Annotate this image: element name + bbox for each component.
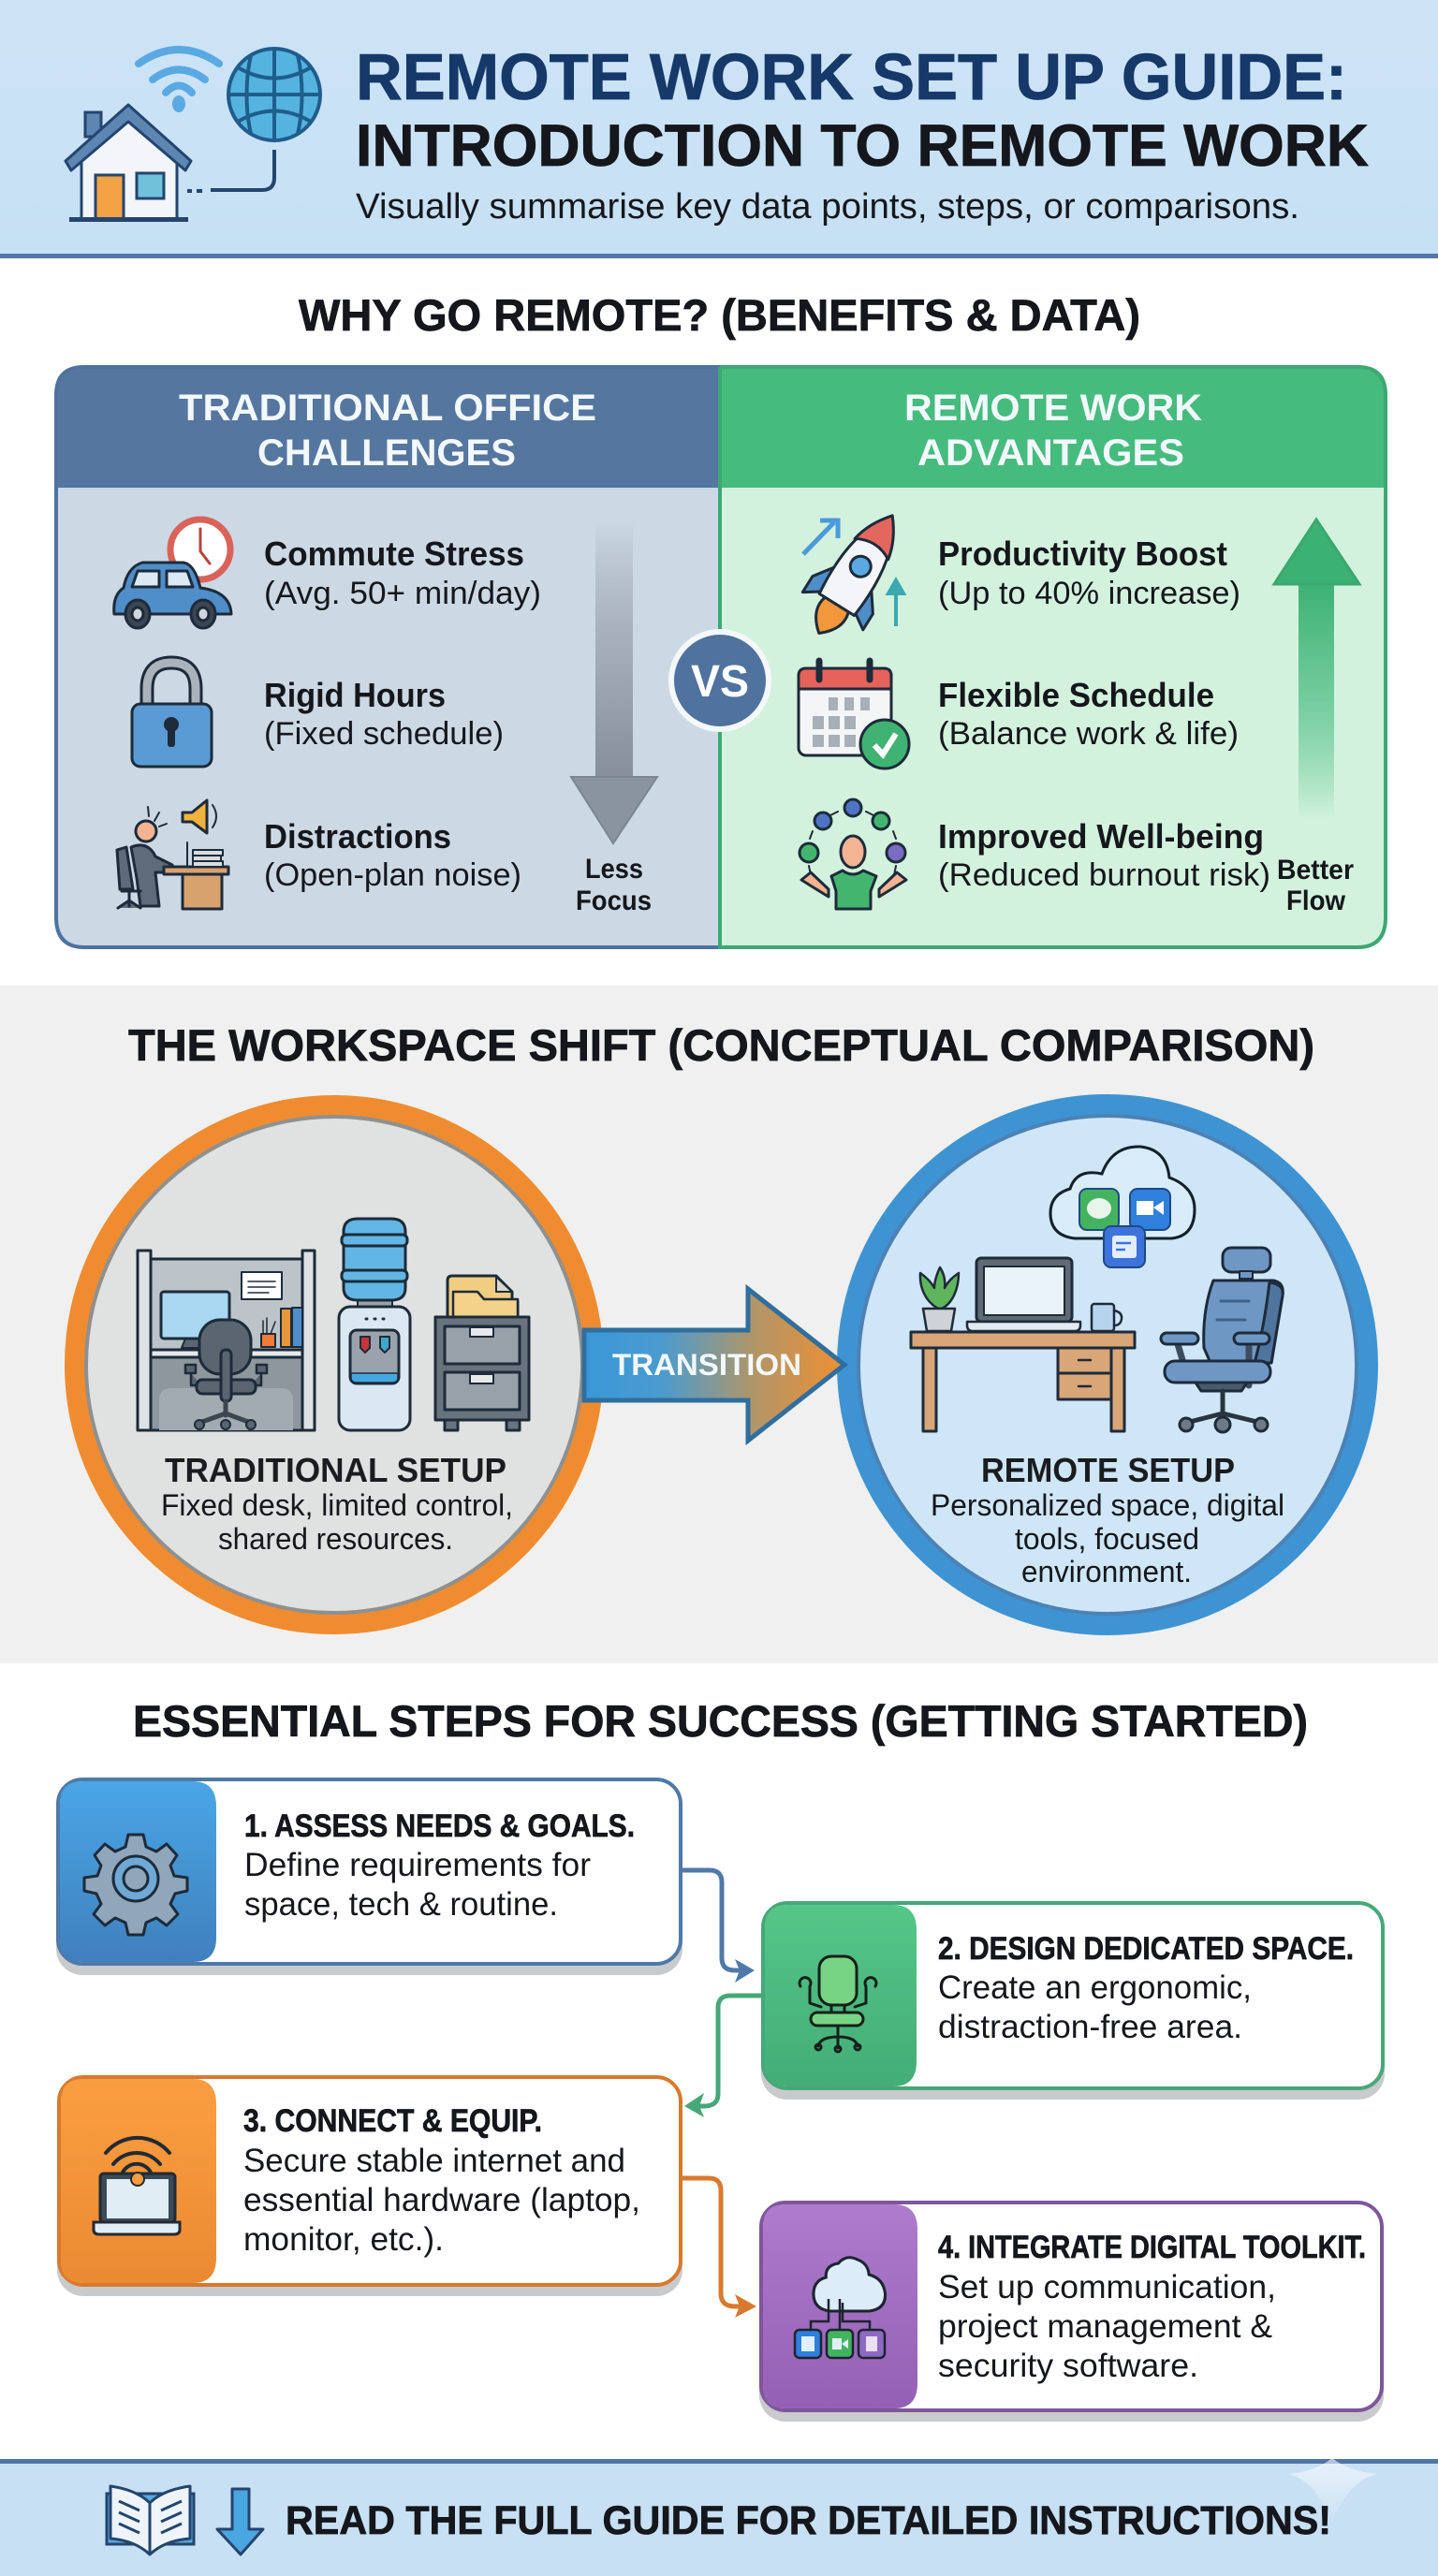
icon: rocket: [789, 497, 922, 652]
icon: calendar with check: [799, 661, 909, 768]
arrow: transition: [584, 1289, 844, 1441]
row: improved well-being: Improved Well-being: [938, 817, 1264, 856]
label: less focus: Less: [585, 854, 643, 885]
row: rigid hours: [264, 676, 504, 752]
icon: open book: [107, 2486, 194, 2554]
row: commute stress: Commute Stress: [264, 534, 524, 573]
row: productivity boost: [938, 534, 1240, 611]
connector: step 3 to 4: [682, 2178, 756, 2318]
badge: vs: VS: [691, 657, 749, 707]
row: distractions: (Open-plan noise): [264, 857, 521, 893]
icon: home with wifi and globe: [66, 49, 320, 222]
subtitle: Visually summarise key data points, steps, or comparisons.: [356, 187, 1299, 227]
icon: gear: [84, 1835, 187, 1935]
description: traditional setup: Fixed desk, limited control,: [161, 1488, 513, 1522]
connector: step 2 to 3: [684, 1996, 761, 2117]
sparkle watermark: [1288, 2458, 1377, 2523]
label: less focus: [576, 854, 652, 916]
label: better flow: Better: [1277, 855, 1354, 886]
panel heading: remote work: REMOTE WORK: [904, 388, 1202, 429]
label: better flow: Flow: [1286, 886, 1346, 916]
arrow: rising flow: [1274, 520, 1359, 820]
heading: why go remote: WHY GO REMOTE? (BENEFITS & DATA): [299, 290, 1140, 340]
row: productivity boost: (Up to 40% increase): [938, 576, 1240, 611]
step card 4: [759, 2203, 1384, 2422]
panel heading: traditional office: TRADITIONAL OFFICE: [179, 388, 596, 429]
text: step 3: monitor, etc.).: [243, 2221, 444, 2258]
label: remote setup: REMOTE SETUP: [981, 1451, 1235, 1489]
text: step 3: [243, 2103, 640, 2258]
text: step 3: Secure stable internet and: [243, 2143, 625, 2179]
row: distractions: Distractions: [264, 817, 451, 856]
icon: cloud network: [795, 2258, 886, 2358]
icon: juggling person: [800, 799, 906, 909]
icon: filing cabinet: [435, 1276, 529, 1430]
icon: padlock: [132, 663, 212, 767]
icon: distracted worker: [117, 800, 228, 909]
text: step 2: 2. DESIGN DEDICATED SPACE.: [938, 1931, 1354, 1967]
row: commute stress: (Avg. 50+ min/day): [264, 576, 541, 611]
text: step 1: 1. ASSESS NEEDS & GOALS.: [244, 1808, 635, 1844]
row: improved well-being: (Reduced burnout risk): [938, 857, 1270, 893]
icon: water cooler: [339, 1219, 410, 1430]
circle: traditional setup: [75, 1105, 594, 1624]
icon: cubicle: [138, 1251, 315, 1430]
row: rigid hours: (Fixed schedule): [264, 716, 504, 752]
label: better flow: [1277, 855, 1354, 916]
icon: down arrow: [217, 2489, 263, 2554]
connector: step 1 to 2: [682, 1870, 755, 1983]
icon: car and clock: [114, 520, 231, 628]
description: remote setup: Personalized space, digital: [931, 1488, 1284, 1522]
row: productivity boost: Productivity Boost: [938, 534, 1227, 573]
arrow: declining focus: [571, 520, 657, 843]
description: traditional setup: shared resources.: [218, 1522, 453, 1556]
icon: desk with laptop: [911, 1258, 1135, 1431]
icon: cloud apps: [1050, 1147, 1195, 1267]
panel heading: traditional office: CHALLENGES: [257, 432, 516, 474]
text: step 2: [938, 1931, 1354, 2045]
text: step 4: 4. INTEGRATE DIGITAL TOOLKIT.: [938, 2230, 1366, 2265]
text: step 2: distraction-free area.: [938, 2009, 1242, 2045]
heading: workspace shift: THE WORKSPACE SHIFT (CONCEPTUAL COMPARISON): [128, 1020, 1314, 1070]
text: step 3: essential hardware (laptop,: [243, 2182, 640, 2218]
text: step 2: Create an ergonomic,: [938, 1969, 1252, 2006]
heading: essential steps: ESSENTIAL STEPS FOR SUCCESS (GETTING STARTED): [133, 1696, 1308, 1746]
row: distractions: [264, 817, 521, 893]
step card 2: [761, 1903, 1385, 2100]
label: less focus: Focus: [576, 886, 652, 916]
text: step 1: Define requirements for: [244, 1847, 591, 1883]
panel: workspace shift: [0, 986, 1438, 1663]
text: step 1: space, tech & routine.: [244, 1886, 558, 1923]
title line 2: INTRODUCTION TO REMOTE WORK: [356, 113, 1369, 179]
panel heading: remote work: ADVANTAGES: [917, 432, 1184, 474]
circle: remote setup: [847, 1105, 1368, 1625]
row: commute stress: [264, 534, 541, 611]
text: step 4: project management &: [938, 2308, 1272, 2345]
panel heading: traditional office: [179, 388, 596, 474]
text: step 4: security software.: [938, 2348, 1198, 2384]
footer banner: [0, 2458, 1438, 2576]
arrow: transition: TRANSITION: [612, 1348, 801, 1382]
row: rigid hours: Rigid Hours: [264, 676, 446, 714]
description: remote setup: [931, 1488, 1284, 1588]
icon: ergonomic chair: [1161, 1248, 1283, 1432]
text: step 1: [244, 1808, 635, 1923]
panel heading: remote work: [904, 388, 1202, 474]
panel: comparison: [54, 365, 1387, 947]
call to action: READ THE FULL GUIDE FOR DETAILED INSTRUCTIONS!: [286, 2498, 1331, 2543]
text: step 3: 3. CONNECT & EQUIP.: [243, 2103, 542, 2139]
label: traditional setup: TRADITIONAL SETUP: [165, 1451, 506, 1489]
text: step 4: Set up communication,: [938, 2269, 1276, 2305]
step card 3: [57, 2077, 682, 2296]
header banner: [0, 0, 1438, 258]
description: traditional setup: [161, 1488, 513, 1556]
description: remote setup: environment.: [1021, 1555, 1192, 1588]
icon: desk chair: [800, 1956, 876, 2052]
badge: vs: [671, 632, 769, 729]
row: improved well-being: [938, 817, 1270, 893]
title line 1: REMOTE WORK SET UP GUIDE:: [356, 40, 1347, 113]
row: flexible schedule: (Balance work & life): [938, 716, 1239, 752]
row: flexible schedule: [938, 676, 1239, 752]
icon: laptop with wifi: [94, 2138, 180, 2234]
text: step 4: [938, 2230, 1366, 2384]
description: remote setup: tools, focused: [1015, 1522, 1199, 1556]
row: flexible schedule: Flexible Schedule: [938, 676, 1214, 714]
step card 1: [56, 1779, 682, 1975]
